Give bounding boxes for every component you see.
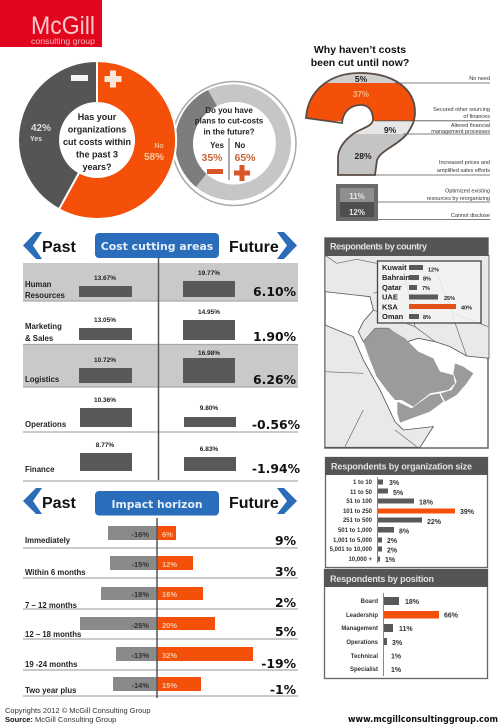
donut: plans to cut costs: in the future? xyxy=(203,128,255,136)
row: 12-18 months: 5% xyxy=(275,624,297,639)
panel: respondents by organization size xyxy=(325,457,488,568)
row: 7-12 months: 7 – 12 months xyxy=(25,601,78,610)
row: human resources xyxy=(25,270,297,300)
row: 7-12 months: 16% xyxy=(162,590,177,599)
impact horizon header: Impact horizon xyxy=(111,498,203,511)
row: 12-18 months: -25% xyxy=(131,621,149,630)
question mark labels: Increased prices and xyxy=(439,160,490,166)
panel: respondents by position: Management xyxy=(341,626,378,632)
panel: respondents by position: Board xyxy=(361,599,378,605)
panel: respondents by position: Leadership xyxy=(346,613,378,619)
panel: cost cutting areas xyxy=(23,232,301,481)
donut: plans to cut costs: 65% xyxy=(234,152,256,164)
donut: has your organization cut costs: years? xyxy=(82,162,112,172)
row: human resources: 13.67% xyxy=(94,275,116,282)
row: finance: Finance xyxy=(25,465,55,474)
question mark labels: Cannot disclose xyxy=(451,213,490,219)
row: operations xyxy=(25,397,301,432)
footer credits: Copyrights 2012 © McGill Consulting Group xyxy=(5,706,151,715)
donut: plans to cut costs: No xyxy=(235,141,245,150)
row: two year plus: -1% xyxy=(270,682,297,697)
panel: respondents by position: 11% xyxy=(399,626,413,633)
row: two year plus: Two year plus xyxy=(25,686,77,695)
question mark chart: 5% xyxy=(355,74,368,84)
donut: has your organization cut costs: organizations xyxy=(68,124,126,134)
question mark dot: 11% xyxy=(349,192,365,201)
donut: plans to cut costs: plans to cut-costs xyxy=(195,116,264,126)
question mark chart: 9% xyxy=(384,125,397,135)
row: marketing and sales: & Sales xyxy=(25,334,54,343)
donut: has your organization cut costs: Has your xyxy=(78,112,117,122)
heading: why haven't costs been cut: been cut until now? xyxy=(311,57,409,69)
panel: respondents by organization size: 8% xyxy=(399,528,410,536)
panel: respondents by organization size: 5,001 to 10,000 xyxy=(330,547,373,553)
row: immediately: 9% xyxy=(275,533,297,548)
row: operations: 10.36% xyxy=(94,397,116,404)
row: 19-24 months: -13% xyxy=(131,651,149,660)
map xyxy=(325,255,489,447)
row: logistics: 10.72% xyxy=(94,357,116,364)
panel: respondents by organization size: 1 to 10 xyxy=(353,480,373,486)
row: within 6 months: 3% xyxy=(275,564,297,579)
question mark labels: resources by reorganizing xyxy=(427,196,490,202)
inset chart: countries: Oman xyxy=(382,312,404,321)
panel: respondents by position: Specialist xyxy=(350,667,378,673)
inset chart: countries: 25% xyxy=(444,296,455,302)
panel: respondents by organization size: 251 to 500 xyxy=(343,518,373,524)
row: operations: Operations xyxy=(25,420,67,429)
row: 7-12 months: -18% xyxy=(131,590,149,599)
inset chart: countries: 8% xyxy=(423,315,431,321)
question mark chart xyxy=(300,70,420,176)
panel: respondents by position: Respondents by position xyxy=(330,574,434,584)
inset chart: countries xyxy=(378,261,481,323)
row: 12-18 months: 12 – 18 months xyxy=(25,630,82,639)
panel: respondents by country xyxy=(325,238,489,448)
question mark labels: Secured other sourcing xyxy=(433,107,490,113)
inset chart: countries: Qatar xyxy=(382,283,402,292)
impact horizon header: Past xyxy=(42,495,76,512)
question mark labels: Altered financial xyxy=(451,123,490,129)
panel: respondents by organization size: 11 to 50 xyxy=(350,490,373,496)
cost cutting header: Past xyxy=(42,239,76,256)
panel: respondents by organization size: 1,001 to 5,000 xyxy=(333,538,373,544)
donut: plans to cut costs: Do you have xyxy=(205,106,253,115)
panel: respondents by organization size: 18% xyxy=(419,500,434,506)
row: human resources: Human xyxy=(25,280,52,289)
panel: respondents by organization size: 2% xyxy=(387,548,398,554)
donut: has your organization cut costs: Yes xyxy=(30,136,42,143)
question mark dot: 12% xyxy=(349,208,365,217)
row: logistics: 16.98% xyxy=(198,350,220,357)
row: within 6 months xyxy=(25,556,297,579)
panel: respondents by organization size: 5% xyxy=(393,490,404,497)
row: 19-24 months: 19 -24 months xyxy=(25,660,78,669)
row: finance: -1.94% xyxy=(252,461,301,476)
row: 7-12 months: 2% xyxy=(275,595,297,610)
question mark labels: amplified sales efforts xyxy=(437,168,490,174)
row: marketing and sales: 13.05% xyxy=(94,317,116,324)
question mark labels: No need xyxy=(469,76,490,82)
donut: plans to cut costs: Yes xyxy=(210,141,224,150)
question mark labels: of finances xyxy=(463,114,490,120)
question mark labels xyxy=(375,76,490,220)
inset chart: countries: 12% xyxy=(428,268,439,274)
question mark labels: Optimized existing xyxy=(445,188,490,194)
inset chart: countries: 7% xyxy=(422,286,430,292)
row: immediately: 6% xyxy=(162,530,173,539)
row: 19-24 months: -19% xyxy=(261,656,297,671)
website url: www.mcgillconsultinggroup.com xyxy=(348,715,498,725)
panel: respondents by organization size: 3% xyxy=(389,480,400,487)
row: logistics: 6.26% xyxy=(253,372,297,387)
panel: respondents by position: Operations xyxy=(346,640,379,646)
row: finance: 6.83% xyxy=(200,446,218,453)
donut: has your organization cut costs: 42% xyxy=(31,123,51,134)
row: finance: 8.77% xyxy=(96,442,114,449)
panel: respondents by position: 3% xyxy=(392,640,403,647)
question mark labels: management processes xyxy=(431,129,490,135)
heading: why haven't costs been cut: Why haven’t costs xyxy=(314,44,406,56)
cost cutting header xyxy=(23,232,297,259)
question mark dot xyxy=(336,184,378,221)
row: two year plus: 15% xyxy=(162,681,177,690)
panel: respondents by organization size: 501 to 1,000 xyxy=(338,528,373,534)
question mark chart: 28% xyxy=(354,151,372,161)
donut: plans to cut costs xyxy=(172,82,296,206)
donut: has your organization cut costs xyxy=(18,61,176,219)
row: operations: 9.80% xyxy=(200,405,218,412)
panel: respondents by position: 18% xyxy=(405,599,420,606)
row: human resources: 6.10% xyxy=(253,284,297,299)
row: within 6 months: Within 6 months xyxy=(25,568,86,577)
footer credits: Source: McGill Consulting Group xyxy=(5,715,116,724)
row: finance xyxy=(25,442,301,476)
panel: respondents by organization size: 22% xyxy=(427,519,442,526)
cost cutting header: Future xyxy=(229,239,279,256)
question mark chart: 37% xyxy=(353,90,369,99)
row: marketing and sales xyxy=(25,309,297,344)
row: 19-24 months xyxy=(25,647,297,671)
row: marketing and sales: 1.90% xyxy=(253,329,297,344)
row: within 6 months: -15% xyxy=(131,560,149,569)
row: 19-24 months: 32% xyxy=(162,651,177,660)
panel: respondents by organization size: 1% xyxy=(385,557,396,564)
row: human resources: Resources xyxy=(25,291,66,300)
inset chart: countries: Bahrain xyxy=(382,273,410,282)
row: immediately: -16% xyxy=(131,530,149,539)
row: 12-18 months xyxy=(25,617,297,639)
row: two year plus xyxy=(25,677,297,697)
donut: plans to cut costs: 35% xyxy=(201,152,223,164)
inset chart: countries: 8% xyxy=(423,276,431,282)
panel: respondents by country: Respondents by country xyxy=(330,242,427,252)
footer credits xyxy=(5,706,151,724)
logo xyxy=(0,0,102,47)
row: human resources: 19.77% xyxy=(198,270,220,277)
panel: respondents by organization size: 39% xyxy=(460,509,475,516)
impact horizon header: Future xyxy=(229,495,279,512)
row: operations: -0.56% xyxy=(252,417,301,432)
donut: has your organization cut costs: cut costs within xyxy=(63,137,131,147)
row: logistics: Logistics xyxy=(25,375,60,384)
donut: has your organization cut costs: 58% xyxy=(144,152,164,163)
panel: respondents by organization size: 51 to 100 xyxy=(346,499,373,505)
row: two year plus: -14% xyxy=(131,681,149,690)
logo: McGill xyxy=(31,12,95,40)
cost cutting header: Cost cutting areas xyxy=(101,240,213,253)
row: immediately xyxy=(25,526,297,548)
donut: has your organization cut costs: the past 3 xyxy=(76,150,118,160)
inset chart: countries: Kuwait xyxy=(382,263,407,272)
row: marketing and sales: 14.95% xyxy=(198,309,220,316)
panel: respondents by organization size: 101 to 250 xyxy=(343,509,373,515)
impact horizon header xyxy=(23,488,297,516)
row: within 6 months: 12% xyxy=(162,560,177,569)
inset chart: countries: KSA xyxy=(382,302,398,312)
panel: respondents by organization size: 2% xyxy=(387,538,398,545)
row: 12-18 months: 20% xyxy=(162,621,177,630)
panel: respondents by organization size: 10,000 + xyxy=(348,557,372,563)
panel: impact horizon xyxy=(23,488,298,698)
panel: respondents by position xyxy=(324,569,488,678)
row: marketing and sales: Marketing xyxy=(25,322,62,331)
row: logistics xyxy=(25,350,297,387)
panel: respondents by position: 1% xyxy=(391,654,402,660)
inset chart: countries: UAE xyxy=(382,292,398,302)
donut: has your organization cut costs: No xyxy=(154,143,164,150)
row: immediately: Immediately xyxy=(25,536,71,545)
row: 7-12 months xyxy=(25,587,297,610)
panel: respondents by position: 66% xyxy=(444,612,459,620)
panel: respondents by position: 1% xyxy=(391,667,402,674)
panel: respondents by position: Technical xyxy=(351,654,378,660)
panel: respondents by organization size: Respondents by organization size xyxy=(331,462,472,472)
heading: why haven't costs been cut xyxy=(311,44,409,69)
logo: consulting group xyxy=(31,36,95,46)
inset chart: countries: 40% xyxy=(461,306,472,312)
